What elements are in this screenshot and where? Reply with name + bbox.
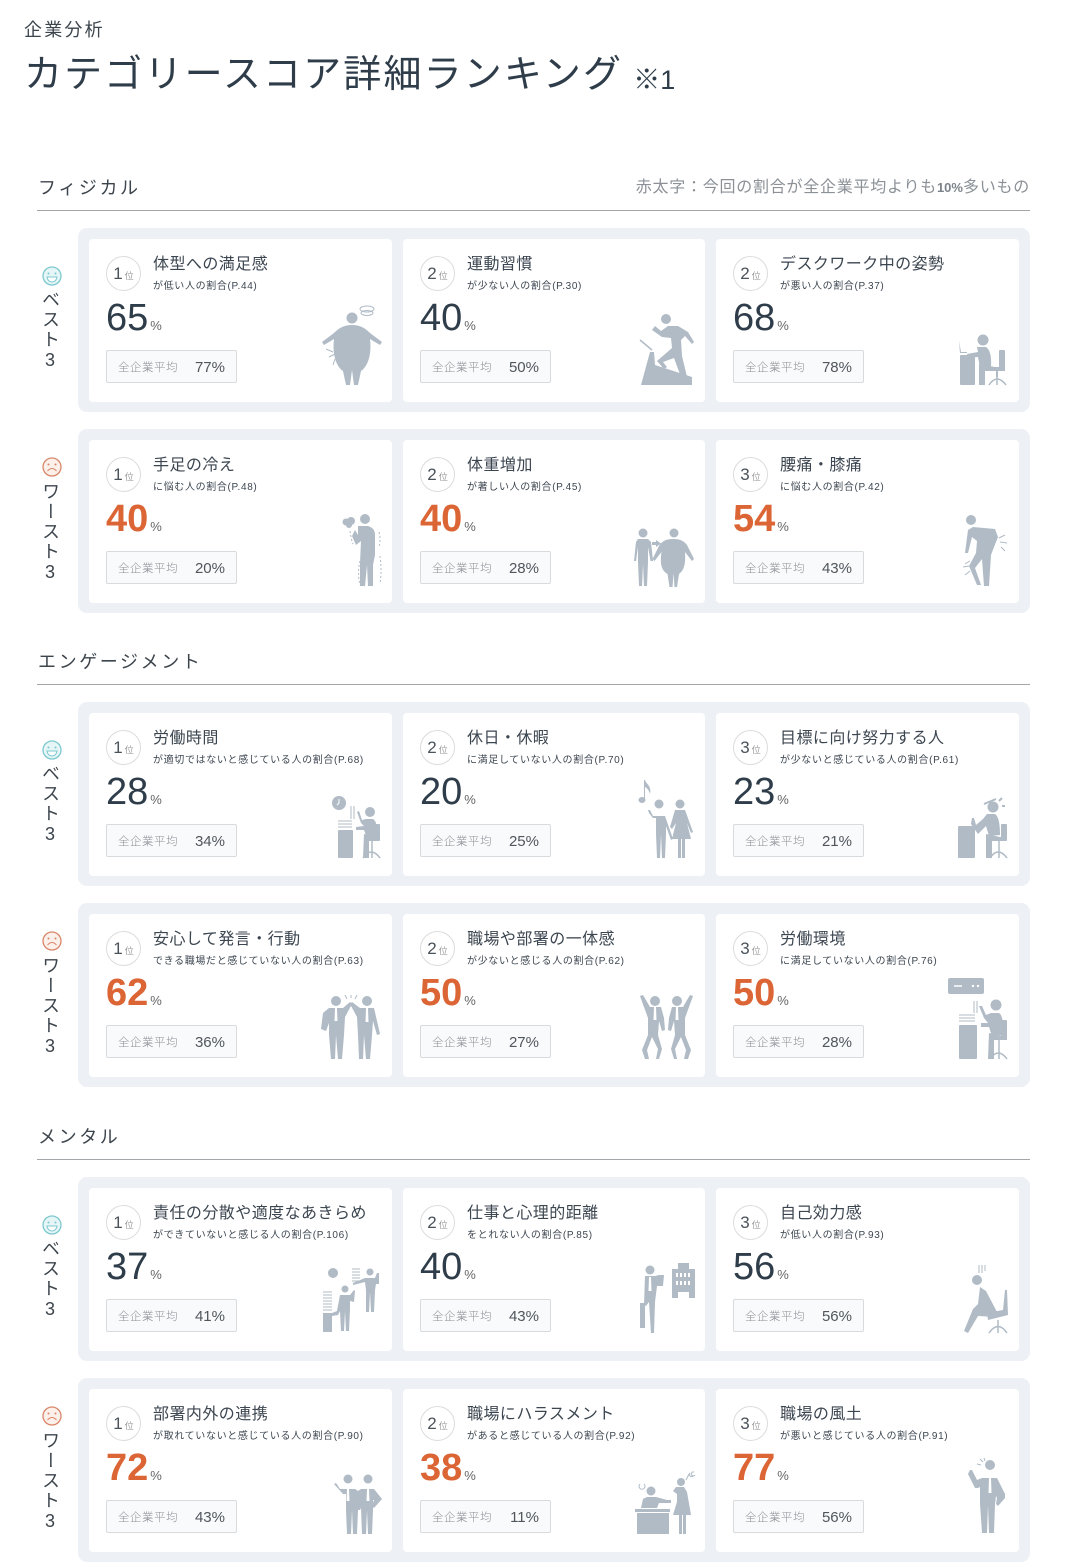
rank badge bbox=[420, 931, 455, 966]
rank badge bbox=[420, 457, 455, 492]
rank badge: 1位 bbox=[113, 465, 134, 484]
rank badge bbox=[420, 1205, 455, 1240]
icon: office workers bbox=[323, 1268, 379, 1332]
company average bbox=[420, 350, 551, 383]
percent value: 50% bbox=[733, 972, 789, 1014]
rank badge: 2位 bbox=[427, 465, 448, 484]
company average: 28% bbox=[509, 560, 539, 577]
rank badge: 2位 bbox=[427, 1414, 448, 1433]
rank badge bbox=[106, 457, 141, 492]
rank badge: 3位 bbox=[740, 1213, 761, 1232]
company average: 56% bbox=[822, 1308, 852, 1325]
percent value: 50% bbox=[420, 972, 476, 1014]
percent value: 40% bbox=[420, 498, 476, 540]
icon: focused worker at desk bbox=[958, 797, 1008, 858]
icon: jumping pair bbox=[640, 995, 693, 1059]
icon: two colleagues bbox=[334, 1474, 382, 1534]
rank badge bbox=[733, 1205, 768, 1240]
company average: 56% bbox=[822, 1509, 852, 1526]
card: back and knee pain bbox=[716, 440, 1019, 603]
item subtitle: が取れていないと感じている人の割合(P.90) bbox=[153, 1431, 364, 1442]
company average bbox=[106, 350, 237, 383]
percent value: 40% bbox=[106, 498, 162, 540]
company average: 34% bbox=[195, 833, 225, 850]
rank badge: 3位 bbox=[740, 465, 761, 484]
item subtitle: が少ないと感じる人の割合(P.62) bbox=[467, 956, 625, 967]
item subtitle: が少ない人の割合(P.30) bbox=[467, 281, 582, 292]
card: exercise habit bbox=[403, 239, 705, 402]
item title: 体重増加 bbox=[467, 457, 533, 474]
rank badge bbox=[106, 931, 141, 966]
item subtitle: が適切ではないと感じている人の割合(P.68) bbox=[153, 755, 364, 766]
item subtitle: をとれない人の割合(P.85) bbox=[467, 1230, 593, 1241]
icon: worker under air conditioner bbox=[948, 978, 1008, 1060]
item title: 労働環境 bbox=[780, 931, 846, 948]
company average: 全企業平均 bbox=[745, 836, 805, 848]
company average: 全企業平均 bbox=[432, 1037, 492, 1049]
card: safe to speak bbox=[89, 914, 392, 1077]
company average: 全企業平均 bbox=[118, 362, 178, 374]
percent value: 72% bbox=[106, 1447, 162, 1489]
card: workplace unity bbox=[403, 914, 705, 1077]
card: working environment bbox=[716, 914, 1019, 1077]
item subtitle: に悩む人の割合(P.42) bbox=[780, 482, 884, 493]
item title: 職場や部署の一体感 bbox=[467, 931, 615, 948]
section heading: engagement: エンゲージメント bbox=[38, 652, 202, 672]
item subtitle: が悪いと感じている人の割合(P.91) bbox=[780, 1431, 948, 1442]
card: cold extremities bbox=[89, 440, 392, 603]
percent value: 56% bbox=[733, 1246, 789, 1288]
percent value: 54% bbox=[733, 498, 789, 540]
item title: 休日・休暇 bbox=[467, 730, 549, 747]
company average: 25% bbox=[509, 833, 539, 850]
company average: 全企業平均 bbox=[432, 362, 492, 374]
company average: 全企業平均 bbox=[118, 1512, 178, 1524]
item title: 職場の風土 bbox=[780, 1406, 862, 1423]
company average: 43% bbox=[822, 560, 852, 577]
company average: 全企業平均 bbox=[432, 1512, 492, 1524]
company average: 43% bbox=[509, 1308, 539, 1325]
company average bbox=[733, 1299, 864, 1332]
company average: 全企業平均 bbox=[432, 836, 492, 848]
item subtitle: があると感じている人の割合(P.92) bbox=[467, 1431, 635, 1442]
rank badge bbox=[733, 730, 768, 765]
company average bbox=[106, 824, 237, 857]
panel: mental best bbox=[78, 1177, 1030, 1361]
label: best 3: ベスト3 bbox=[40, 290, 60, 372]
item title: 仕事と心理的距離 bbox=[467, 1205, 599, 1222]
item subtitle: が低い人の割合(P.93) bbox=[780, 1230, 884, 1241]
company average: 全企業平均 bbox=[118, 563, 178, 575]
icon: frustrated man bbox=[968, 1457, 1010, 1535]
rank badge: 1位 bbox=[113, 1213, 134, 1232]
rank badge bbox=[106, 256, 141, 291]
percent value: 40% bbox=[420, 1246, 476, 1288]
rank badge bbox=[420, 1406, 455, 1441]
item title: 労働時間 bbox=[153, 730, 219, 747]
percent value: 20% bbox=[420, 771, 476, 813]
rank badge: 3位 bbox=[740, 1414, 761, 1433]
label: worst 3: ワースト3 bbox=[40, 956, 60, 1058]
item title: 職場にハラスメント bbox=[467, 1406, 615, 1423]
item title: 目標に向け努力する人 bbox=[780, 730, 945, 747]
icon: weight gain figures bbox=[634, 528, 694, 587]
rank badge: 2位 bbox=[427, 939, 448, 958]
company average bbox=[420, 551, 551, 584]
item title: 手足の冷え bbox=[153, 457, 235, 474]
icon: person with pain bbox=[963, 515, 1007, 586]
item subtitle: が著しい人の割合(P.45) bbox=[467, 482, 582, 493]
rank badge: 2位 bbox=[740, 264, 761, 283]
card: harassment bbox=[403, 1389, 705, 1552]
company average: 全企業平均 bbox=[745, 1037, 805, 1049]
item subtitle: が悪い人の割合(P.37) bbox=[780, 281, 884, 292]
company average bbox=[420, 1025, 551, 1058]
icon: sad face bbox=[42, 931, 62, 951]
company average: 20% bbox=[195, 560, 225, 577]
item subtitle: ができていないと感じる人の割合(P.106) bbox=[153, 1230, 349, 1241]
section heading: mental: メンタル bbox=[38, 1127, 120, 1147]
company average bbox=[106, 1025, 237, 1058]
item title: 責任の分散や適度なあきらめ bbox=[153, 1205, 367, 1222]
card: body satisfaction bbox=[89, 239, 392, 402]
company average bbox=[420, 1500, 551, 1533]
company average: 21% bbox=[822, 833, 852, 850]
label: best 3: ベスト3 bbox=[40, 764, 60, 846]
company average: 全企業平均 bbox=[745, 362, 805, 374]
item title: 安心して発言・行動 bbox=[153, 931, 301, 948]
percent value: 62% bbox=[106, 972, 162, 1014]
card: psychological distance from work bbox=[403, 1188, 705, 1351]
icon: worker with clock bbox=[332, 796, 380, 858]
panel: physical best bbox=[78, 228, 1030, 412]
panel: physical worst bbox=[78, 429, 1030, 613]
icon: sad face bbox=[42, 457, 62, 477]
icon: slumped sitter bbox=[964, 1265, 1008, 1334]
rank badge bbox=[420, 730, 455, 765]
percent value: 38% bbox=[420, 1447, 476, 1489]
company average: 全企業平均 bbox=[745, 1311, 805, 1323]
company average: 全企業平均 bbox=[432, 1311, 492, 1323]
card: cross-department cooperation bbox=[89, 1389, 392, 1552]
rank badge bbox=[420, 256, 455, 291]
panel: mental worst bbox=[78, 1378, 1030, 1562]
company average: 全企業平均 bbox=[432, 563, 492, 575]
card: days off bbox=[403, 713, 705, 876]
eyebrow label: 企業分析 bbox=[24, 20, 105, 40]
icon: couple and music note bbox=[638, 780, 693, 858]
company average bbox=[420, 824, 551, 857]
rank badge bbox=[733, 1406, 768, 1441]
company average: 43% bbox=[195, 1509, 225, 1526]
rank badge: 1位 bbox=[113, 738, 134, 757]
company average: 27% bbox=[509, 1034, 539, 1051]
icon: smile face bbox=[42, 1215, 62, 1235]
rank badge bbox=[106, 730, 141, 765]
company average: 78% bbox=[822, 359, 852, 376]
company average bbox=[733, 1025, 864, 1058]
percent value: 68% bbox=[733, 297, 789, 339]
item title: 部署内外の連携 bbox=[153, 1406, 268, 1423]
card: desk posture bbox=[716, 239, 1019, 402]
icon: boss and employee bbox=[635, 1470, 699, 1537]
company average: 36% bbox=[195, 1034, 225, 1051]
card: goal effort bbox=[716, 713, 1019, 876]
percent value: 77% bbox=[733, 1447, 789, 1489]
company average: 41% bbox=[195, 1308, 225, 1325]
company average bbox=[733, 350, 864, 383]
card: self-efficacy bbox=[716, 1188, 1019, 1351]
company average bbox=[733, 551, 864, 584]
rank badge: 2位 bbox=[427, 738, 448, 757]
company average: 77% bbox=[195, 359, 225, 376]
company average: 50% bbox=[509, 359, 539, 376]
label: worst 3: ワースト3 bbox=[40, 1431, 60, 1533]
rank badge: 2位 bbox=[427, 1213, 448, 1232]
company average: 全企業平均 bbox=[118, 1311, 178, 1323]
icon: businessman and building bbox=[640, 1263, 695, 1333]
icon: high five bbox=[321, 995, 380, 1059]
company average bbox=[106, 1299, 237, 1332]
title: カテゴリースコア詳細ランキング ※1 bbox=[24, 54, 675, 96]
icon: person feeling cold bbox=[342, 514, 382, 586]
icon: sad face bbox=[42, 1406, 62, 1426]
company average bbox=[733, 824, 864, 857]
rank badge bbox=[733, 256, 768, 291]
rank badge: 1位 bbox=[113, 264, 134, 283]
item subtitle: が少ないと感じている人の割合(P.61) bbox=[780, 755, 959, 766]
company average bbox=[106, 1500, 237, 1533]
rank badge: 1位 bbox=[113, 939, 134, 958]
item title: 体型への満足感 bbox=[153, 256, 268, 273]
company average: 全企業平均 bbox=[745, 563, 805, 575]
rank badge bbox=[106, 1406, 141, 1441]
percent value: 23% bbox=[733, 771, 789, 813]
percent value: 37% bbox=[106, 1246, 162, 1288]
card: weight gain bbox=[403, 440, 705, 603]
icon: smile face bbox=[42, 740, 62, 760]
rank badge bbox=[733, 931, 768, 966]
item subtitle: に満足していない人の割合(P.76) bbox=[780, 956, 937, 967]
card: delegating responsibility bbox=[89, 1188, 392, 1351]
company average: 全企業平均 bbox=[118, 836, 178, 848]
item subtitle: が低い人の割合(P.44) bbox=[153, 281, 257, 292]
item title: 腰痛・膝痛 bbox=[780, 457, 862, 474]
panel: engagement best bbox=[78, 702, 1030, 886]
company average: 全企業平均 bbox=[745, 1512, 805, 1524]
item title: デスクワーク中の姿勢 bbox=[780, 256, 945, 273]
rank badge: 1位 bbox=[113, 1414, 134, 1433]
company average: 全企業平均 bbox=[118, 1037, 178, 1049]
company average bbox=[106, 551, 237, 584]
card: working hours bbox=[89, 713, 392, 876]
percent value: 28% bbox=[106, 771, 162, 813]
label: best 3: ベスト3 bbox=[40, 1239, 60, 1321]
rank badge: 3位 bbox=[740, 738, 761, 757]
icon: smile face bbox=[42, 266, 62, 286]
label: worst 3: ワースト3 bbox=[40, 482, 60, 584]
panel: engagement worst bbox=[78, 903, 1030, 1087]
section heading: physical: フィジカル bbox=[38, 178, 141, 198]
company average bbox=[420, 1299, 551, 1332]
item subtitle: に満足していない人の割合(P.70) bbox=[467, 755, 624, 766]
icon: desk worker bbox=[959, 334, 1006, 386]
percent value: 65% bbox=[106, 297, 162, 339]
rank badge bbox=[733, 457, 768, 492]
item subtitle: できる職場だと感じていない人の割合(P.63) bbox=[153, 956, 364, 967]
rank badge bbox=[106, 1205, 141, 1240]
percent value: 40% bbox=[420, 297, 476, 339]
card: workplace culture bbox=[716, 1389, 1019, 1552]
item subtitle: に悩む人の割合(P.48) bbox=[153, 482, 257, 493]
icon: overweight person bbox=[322, 306, 382, 385]
legend note: 赤太字：今回の割合が全企業平均よりも10%多いもの bbox=[636, 179, 1030, 196]
company average: 28% bbox=[822, 1034, 852, 1051]
company average: 11% bbox=[510, 1509, 539, 1526]
rank badge: 2位 bbox=[427, 264, 448, 283]
company average bbox=[733, 1500, 864, 1533]
item title: 自己効力感 bbox=[780, 1205, 862, 1222]
icon: treadmill runner bbox=[640, 314, 694, 385]
rank badge: 3位 bbox=[740, 939, 761, 958]
item title: 運動習慣 bbox=[467, 256, 533, 273]
